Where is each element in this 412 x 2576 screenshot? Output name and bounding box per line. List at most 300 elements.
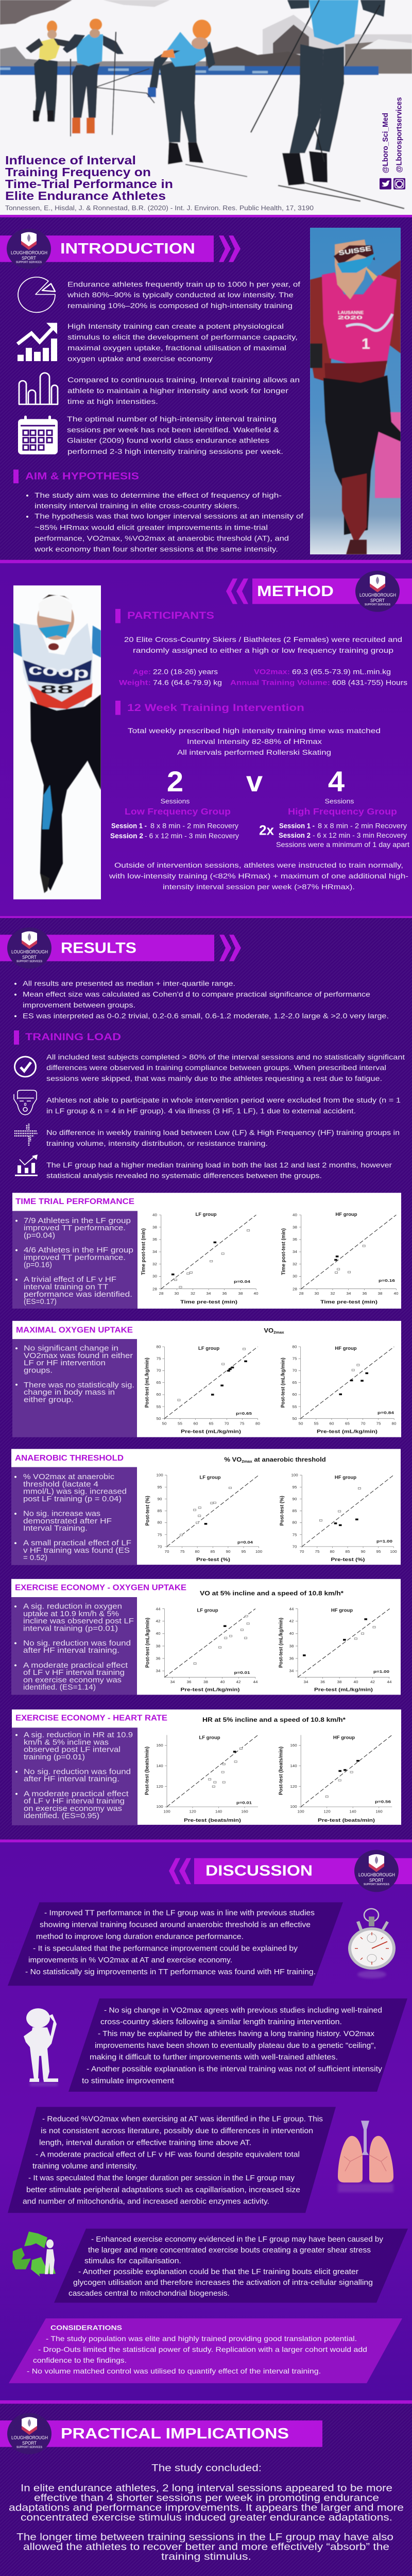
participant statistics: 22.0 (18-26) years [153, 668, 218, 676]
participant statistics: 74.6 (64.6-79.9) kg [153, 679, 222, 687]
scatter chart: HF group time trial: 34 [347, 1291, 351, 1296]
citation: Tonnessen, E., Hisdal, J. & Ronnestad, B.R. (2020) - Int. J. Environ. Res. Public Health, 17, 3190 [5, 204, 314, 212]
bullet list: statistics [14, 980, 389, 1020]
heading banner: method: METHOD [257, 583, 334, 600]
scatter chart: LF group anaerobic threshold: 85 [158, 1509, 162, 1513]
icon: pie chart [18, 277, 55, 312]
findings box: VO2max: VO2max was found in either [24, 1351, 133, 1360]
scatter chart: LF group anaerobic threshold: 95 [158, 1485, 162, 1489]
scatter chart: HF group oxygen uptake: Pre-test (mL/kg/min) [314, 1687, 373, 1692]
text: no difference in load: training volume, intensity distribution, or resistance training. [46, 1140, 268, 1148]
heading: aim and hypothesis: AIM & HYPOTHESIS [25, 471, 139, 482]
scatter chart: LF group time trial: 28 [152, 1287, 157, 1291]
scatter chart: LF group anaerobic threshold: p=0.04 [237, 1540, 253, 1545]
scatter chart: LF group anaerobic threshold: 100 [255, 1549, 263, 1554]
scatter chart: HF group anaerobic threshold [279, 1472, 397, 1563]
findings box: heart rate economy: A moderate practical effect [24, 1790, 129, 1798]
bullet list: statistics: ES was interpreted as 0-0.2 trivial, 0.2-0.6 small, 0.6-1.2 moderate, 1.2-2.0 large & >2.0 very large. [23, 1012, 389, 1020]
scatter chart: LF group time trial [141, 1212, 259, 1305]
scatter chart: HF group heart rate: p=0.56 [375, 1800, 391, 1804]
scatter chart: LF group VO2max: 55 [178, 1421, 183, 1426]
heading: exercise economy heart rate: EXERCISE ECONOMY - HEART RATE [15, 1714, 167, 1723]
scatter chart: LF group heart rate: p=0.01 [236, 1801, 252, 1805]
scatter chart: LF group anaerobic threshold: 90 [226, 1549, 231, 1554]
scatter chart: HF group anaerobic threshold: 95 [293, 1485, 297, 1489]
scatter chart: HF group VO2max: 70 [361, 1421, 366, 1426]
findings box: anaerobic threshold: % VO2max at anaerobic [23, 1472, 114, 1481]
scatter chart: HF group anaerobic threshold: 80 [330, 1549, 335, 1554]
findings box: heart rate economy: km/h & 5% incline was [24, 1738, 109, 1747]
findings box: time trial: 7/9 Athletes in the LF group [24, 1216, 131, 1225]
scatter chart: HF group time trial: 32 [331, 1291, 335, 1296]
scatter chart: HF group heart rate: 120 [323, 1809, 331, 1814]
scatter chart: HF group oxygen uptake: 38 [289, 1644, 294, 1649]
scatter chart: LF group anaerobic threshold: 85 [211, 1549, 215, 1554]
panel: anaerobic threshold [11, 1449, 401, 1565]
scatter chart: LF group anaerobic threshold: 80 [195, 1549, 200, 1554]
title: Training Frequency on [5, 166, 151, 179]
participant statistics: Weight: [119, 679, 151, 687]
text: median training load: The LF group had a higher median training load in both the last 12 and last 2 months, however [46, 1161, 392, 1170]
comparison: 2 v 4 sessions: v [246, 766, 263, 798]
chart title: VO2max: 2max [273, 1330, 284, 1334]
scatter chart: LF group oxygen uptake: 34 [156, 1668, 161, 1673]
callout: anaerobic threshold discussion: is not consistent across literature, possibly due to differences in intervention [41, 2127, 313, 2135]
logo: Loughborough Sport: SPORT [370, 598, 385, 603]
scatter chart: HF group VO2max: 80 [293, 1345, 297, 1349]
scatter chart: HF group anaerobic threshold: 90 [361, 1549, 366, 1554]
chart title: percent VO2max at anaerobic threshold: 2max [242, 1459, 252, 1464]
heading: 12 week training intervention [115, 701, 304, 715]
logo: Loughborough Sport: SUPPORT SERVICES [16, 2446, 42, 2449]
scatter chart: HF group heart rate: Post-test (beats/min) [278, 1747, 284, 1795]
panel: maximal oxygen uptake [12, 1321, 401, 1437]
heading banner: results [0, 935, 241, 961]
panel: exercise economy heart rate [12, 1709, 401, 1825]
scatter chart: LF group anaerobic threshold: 70 [165, 1549, 169, 1554]
scatter chart: HF group anaerobic threshold: 95 [376, 1549, 381, 1554]
text: compliance: sessions were skipped, that was mainly due to the athletes requesting a rest due to fatigue. [46, 1075, 382, 1083]
scatter chart: HF group time trial: 34 [293, 1249, 298, 1254]
logo: Loughborough Sport: SPORT [22, 256, 36, 261]
callout: VO2max discussion [68, 1998, 407, 2092]
scatter chart: LF group VO2max: 60 [157, 1392, 161, 1397]
scatter chart: HF group oxygen uptake: 44 [289, 1606, 294, 1611]
heading banner: discussion [169, 1858, 412, 1884]
text: no difference in load [46, 1129, 400, 1148]
logo: Loughborough Sport: LOUGHBOROUGH [11, 2435, 48, 2440]
heading banner: introduction: INTRODUCTION [60, 241, 195, 257]
findings box: anaerobic threshold: demonstrated after HF [23, 1517, 112, 1526]
callout: considerations: - The study population was elite and highly trained providing good translation potential. [46, 2334, 357, 2343]
logo: Loughborough Sport [354, 1850, 399, 1892]
callout: time trial discussion [8, 1902, 343, 1986]
text: compliance: differences were observed in training compliance between groups. When prescribed interval [46, 1064, 386, 1072]
scatter chart: HF group time trial: Time pre-test (min) [320, 1299, 377, 1305]
scatter chart: HF group heart rate: 160 [375, 1809, 383, 1814]
bullet list: aim and hypothesis: The hypothesis was that two longer interval sessions at an intensity of [35, 513, 304, 521]
scatter chart: HF group heart rate: Pre-test (beats/min) [318, 1818, 375, 1823]
text: study conclusion: training stimulus. [161, 2551, 251, 2563]
high frequency session details: - 6 x 12 min - 3 min Recovery [313, 831, 407, 839]
callout: considerations: CONSIDERATIONS [50, 2324, 122, 2331]
scatter chart: LF group anaerobic threshold: LF group [199, 1475, 221, 1480]
chart title: VO at 5% incline: VO at 5% incline and a speed of 10.8 km/h* [200, 1590, 344, 1597]
findings box: time trial: (p=0.04) [24, 1231, 55, 1240]
scatter chart: LF group VO2max: 75 [240, 1421, 245, 1426]
skier 3 [160, 61, 197, 142]
chart title: HR at 5% incline: HR at 5% incline and a speed of 10.8 km/h* [202, 1716, 346, 1723]
scatter chart: HF group time trial: Time post-test (min) [281, 1228, 287, 1275]
high frequency session details: Session 1 - [279, 822, 315, 830]
scatter chart: HF group heart rate [278, 1735, 392, 1823]
divider bar [0, 2400, 412, 2404]
text: participants description: randomly assigned to either a high or low frequency training group [133, 647, 393, 655]
callout: VO2max discussion: improvements have been shown to eventually plateau due to a genetic "ceiling", [95, 2041, 376, 2050]
scatter chart: LF group VO2max: 80 [157, 1345, 161, 1349]
photo: female skier in pink bib: 2020 [338, 315, 363, 321]
scatter chart: LF group time trial: 34 [152, 1249, 158, 1254]
scatter chart: HF group time trial: p=0.16 [379, 1278, 396, 1283]
findings box: VO2max: LF or HF intervention [24, 1359, 106, 1367]
callout: time trial discussion: - Improved TT performance in the LF group was in line with previous studies [44, 1909, 315, 1918]
callout: considerations: - Drop-Outs limited the statistical power of study. Replication with a larger cohort would add [38, 2345, 367, 2353]
scatter chart: LF group oxygen uptake: 34 [170, 1680, 175, 1684]
scatter chart: HF group heart rate: 120 [290, 1784, 297, 1789]
findings box: oxygen uptake economy: identified. (ES=1.14) [23, 1683, 96, 1692]
icon: stopwatch [348, 1909, 396, 1978]
heading banner: practical implications: PRACTICAL IMPLICATIONS [61, 2426, 289, 2442]
scatter chart: LF group oxygen uptake: 38 [203, 1680, 208, 1684]
text: participants description [124, 636, 402, 655]
findings box: time trial: performance was identified. [24, 1290, 132, 1299]
callout: exercise economy discussion: glycogen utilisation and therefore increases the activation of intra-cellular signalling [73, 2278, 373, 2287]
scatter chart: HF group VO2max: 55 [314, 1421, 319, 1426]
callout: exercise economy discussion: - Another possible explanation could be that the LF training bouts elicit greater [78, 2267, 358, 2276]
findings box: time trial: 4/6 Athletes in the HF group [24, 1246, 133, 1255]
icon: lungs [338, 2121, 393, 2192]
callout: anaerobic threshold discussion: length, interval duration or effective training time above AT. [39, 2139, 251, 2147]
scatter chart: HF group time trial: 36 [363, 1291, 367, 1296]
findings box: VO2max: either group. [24, 1396, 74, 1404]
findings box: heart rate economy: No sig. reduction was found [24, 1768, 131, 1776]
text: study conclusion: allowed the athletes to recover better and more effectively “absorb” the [23, 2541, 389, 2553]
scatter chart: HF group time trial: 40 [394, 1291, 399, 1296]
comparison: 2 v 4 sessions: Sessions [161, 798, 190, 805]
comparison: 2 v 4 sessions: Sessions [325, 798, 354, 805]
scatter chart: HF group anaerobic threshold: 75 [315, 1549, 320, 1554]
findings box: heart rate economy [12, 1727, 138, 1825]
scatter chart: LF group anaerobic threshold: Pre-test (%) [196, 1557, 230, 1563]
scatter chart: HF group VO2max: 65 [345, 1421, 350, 1426]
text: intervention description: Interval Intensity 82-88% of HRmax [187, 738, 322, 746]
scatter chart: LF group time trial: Time post-test (min) [141, 1228, 147, 1275]
scatter chart: HF group time trial: 38 [378, 1291, 382, 1296]
findings box: oxygen uptake economy: incline was observed post LF [23, 1617, 134, 1625]
scatter chart: LF group heart rate: 140 [156, 1764, 163, 1768]
scatter chart: HF group heart rate: 140 [349, 1809, 356, 1814]
logo: Loughborough Sport [7, 927, 52, 969]
callout: VO2max discussion: making it difficult to further improvements with well-trained athletes. [90, 2053, 338, 2062]
findings box: anaerobic threshold: v HF training was found (ES [23, 1546, 130, 1555]
findings box: VO2max: change in body mass in [24, 1388, 115, 1397]
scatter chart: HF group anaerobic threshold: 70 [293, 1545, 297, 1549]
heading: 12 week training intervention: 12 Week Training Intervention [127, 703, 304, 714]
findings box: oxygen uptake economy: A sig. reduction in oxygen [23, 1602, 122, 1611]
scatter chart: HF group time trial: 38 [293, 1225, 297, 1229]
bullet list: statistics: All results are presented as median + inter-quartile range. [23, 980, 235, 988]
text: continuous vs interval: Compared to continuous training, Interval training allows an [67, 376, 300, 384]
photo: male skier in Coop bib [13, 585, 101, 900]
chart title: percent VO2max at anaerobic threshold: % VO [224, 1456, 242, 1463]
text: study conclusion: adaptations and performance improvements. It appears the larger and more [9, 2502, 404, 2513]
findings box: oxygen uptake economy: of LF v HF interval training [23, 1668, 125, 1677]
findings box: time trial: (ES=0.17) [24, 1297, 57, 1306]
text: median training load: statistical analysis revealed no systematic differences between the groups. [46, 1172, 322, 1180]
scatter chart: LF group heart rate: 160 [156, 1743, 163, 1748]
low frequency session details [110, 822, 239, 840]
comparison: 2 v 4 sessions: 4 [328, 766, 345, 798]
low frequency session details: 8 x 8 min - 2 min Recovery [150, 822, 239, 830]
scatter chart: HF group anaerobic threshold: 85 [346, 1549, 350, 1554]
scatter chart: LF group oxygen uptake: 36 [187, 1680, 191, 1684]
callout: considerations [9, 2318, 402, 2383]
scatter chart: HF group time trial: 36 [293, 1237, 297, 1242]
photo: male skier in Coop bib: coop [28, 661, 90, 682]
heading banner: discussion: DISCUSSION [205, 1862, 313, 1879]
social handles: @Lborosportservices [395, 97, 404, 173]
divider bar [0, 1839, 412, 1842]
photo: female skier in pink bib: SUISSE [338, 245, 372, 257]
scatter chart: HF group anaerobic threshold: Pre-test (%) [331, 1557, 365, 1563]
participant statistics [119, 668, 407, 687]
callout: exercise economy discussion: the larger and more concentrated exercise bouts creating a greater shear stress [88, 2246, 371, 2255]
callout: time trial discussion: showing interval training focused around anaerobic threshold is an effective [40, 1921, 311, 1929]
comparison: 2 v 4 sessions: Low Frequency Group [125, 806, 231, 817]
scatter chart: HF group VO2max: p=0.84 [377, 1411, 394, 1415]
callout: anaerobic threshold discussion: better stimulate peripheral adaptations such as capillarisation, increased size [26, 2185, 300, 2194]
text: outside of intervention: with low-intensity training (<82% HRmax) + maximum of one additional high- [109, 872, 408, 880]
heading: maximal oxygen uptake: MAXIMAL OXYGEN UPTAKE [16, 1326, 133, 1334]
findings box: time trial: A trivial effect of LF v HF [24, 1276, 116, 1284]
scatter chart: HF group anaerobic threshold: Post-test (%) [279, 1496, 285, 1526]
scatter chart: HF group time trial [281, 1212, 399, 1305]
scatter chart: LF group heart rate: Pre-test (beats/min) [184, 1818, 241, 1823]
scatter chart: HF group anaerobic threshold: 80 [293, 1520, 297, 1525]
text: intervention description: Total weekly prescribed high intensity training time was matched [128, 727, 381, 735]
scatter chart: LF group heart rate: 140 [215, 1809, 222, 1814]
comparison: 2 v 4 sessions [125, 766, 397, 817]
bullet list: aim and hypothesis: The study aim was to determine the effect of frequency of high- [35, 492, 282, 500]
icon: dotted arrows [14, 1124, 38, 1146]
scatter chart: HF group oxygen uptake: 36 [320, 1680, 325, 1684]
scatter chart: HF group VO2max: 55 [293, 1404, 297, 1409]
scatter chart: LF group oxygen uptake [145, 1606, 258, 1692]
scatter chart: LF group VO2max: 80 [255, 1421, 261, 1426]
low frequency session details: - 6 x 12 min - 3 min Recovery [145, 832, 239, 840]
logo: Loughborough Sport: SUPPORT SERVICES [365, 603, 390, 606]
findings box: oxygen uptake economy: A moderate practical effect [23, 1661, 128, 1670]
scatter chart: HF group anaerobic threshold: 75 [293, 1533, 297, 1537]
scatter chart: LF group time trial: Time pre-test (min) [180, 1299, 237, 1305]
findings box: anaerobic threshold: threshold (lactate 4 [23, 1480, 98, 1488]
scatter chart: HF group anaerobic threshold: 100 [390, 1549, 397, 1554]
scatter chart: LF group heart rate: 100 [163, 1809, 170, 1814]
scatter chart: LF group anaerobic threshold: 75 [158, 1533, 162, 1537]
high frequency session details: 8 x 8 min - 2 min Recovery [318, 822, 407, 830]
scatter chart: LF group time trial: 32 [191, 1291, 195, 1296]
scatter chart: LF group time trial: 28 [159, 1291, 163, 1296]
high frequency session details: Sessions were a minimum of 1 day apart [276, 840, 409, 849]
text: participants description: 20 Elite Cross-Country Skiers / Biathletes (2 Females) were recruited and [124, 636, 402, 644]
callout: time trial discussion: - It is speculated that the performance improvement could be explained by [33, 1944, 298, 1953]
findings box: oxygen uptake economy: after HF interval training. [23, 1647, 119, 1655]
scatter chart: LF group heart rate: LF group [199, 1735, 220, 1740]
findings box: anaerobic threshold: No sig. increase was [23, 1510, 100, 1518]
skier 4 foreground [289, 44, 323, 153]
text: continuous vs interval: time at high intensities. [67, 398, 158, 406]
panel: method [0, 563, 412, 916]
callout: exercise economy discussion [54, 2229, 408, 2303]
scatter chart: LF group oxygen uptake: 42 [236, 1680, 241, 1684]
icon: rounded bars [19, 373, 58, 404]
text: compliance: All included test subjects completed > 80% of the interval sessions and no statistically significant [46, 1054, 405, 1061]
scatter chart: LF group VO2max: LF group [198, 1346, 220, 1351]
scatter chart: LF group time trial: 30 [152, 1274, 158, 1279]
scatter chart: LF group anaerobic threshold: Post-test (%) [145, 1496, 151, 1526]
findings box: oxygen uptake economy: on exercise economy was [23, 1676, 122, 1684]
bullet list: aim and hypothesis: work economy than four shorter sessions at the same intensity. [34, 546, 278, 553]
heading: training load: TRAINING LOAD [25, 1032, 121, 1043]
scatter chart: HF group VO2max: 60 [293, 1392, 297, 1397]
scatter chart: LF group VO2max: 65 [157, 1380, 161, 1385]
logo: Loughborough Sport: LOUGHBOROUGH [11, 950, 48, 954]
scatter chart: LF group anaerobic threshold: 100 [156, 1472, 163, 1477]
scatter chart: LF group VO2max [144, 1345, 261, 1434]
scatter chart: HF group anaerobic threshold: 70 [300, 1549, 304, 1554]
logo: Loughborough Sport [7, 2413, 52, 2454]
scatter chart: LF group time trial: 40 [152, 1213, 158, 1217]
text: high intensity stimulus: High Intensity training can create a potent physiological [67, 323, 284, 331]
scatter chart: LF group VO2max: Post-test (mL/kg/min) [144, 1358, 150, 1408]
callout: anaerobic threshold discussion [8, 2107, 336, 2213]
icon: calendar [18, 416, 58, 454]
findings box: VO2max: No significant change in [24, 1344, 118, 1352]
text: optimal number of sessions: performed 2-3 high intensity training sessions per week. [67, 448, 283, 456]
scatter chart: HF group VO2max: 75 [293, 1357, 297, 1361]
chart title: VO2max: VO [264, 1327, 273, 1334]
scatter chart: LF group VO2max: 50 [157, 1416, 161, 1421]
scatter chart: LF group anaerobic threshold: 80 [158, 1520, 162, 1525]
heading: participants [115, 609, 214, 623]
findings box: VO2max [12, 1339, 137, 1437]
text: optimal number of sessions: The optimal number of high-intensity interval training [67, 415, 277, 423]
scatter chart: HF group oxygen uptake [278, 1606, 392, 1692]
text: exclusions: in LF group & n = 4 in HF group). 4 via illness (3 HF, 1 LF), 1 due to external accident. [46, 1107, 356, 1115]
text: study conclusion: The study concluded: [151, 2463, 262, 2473]
text: optimal number of sessions: sessions per week has not been identified. Wakefield & [67, 426, 279, 434]
scatter chart: LF group heart rate: 160 [241, 1809, 248, 1814]
photo: male skier in Coop bib: 88 [40, 683, 74, 696]
scatter chart: HF group anaerobic threshold: p=1.00 [376, 1539, 393, 1544]
scatter chart: HF group time trial: HF group [335, 1212, 357, 1217]
scatter chart: LF group anaerobic threshold [145, 1472, 263, 1563]
callout: VO2max discussion: - This may be explained by the athletes having a long training history. VO2max [98, 2029, 374, 2038]
scatter chart: LF group anaerobic threshold: 95 [242, 1549, 246, 1554]
heading: time trial performance: TIME TRIAL PERFORMANCE [15, 1197, 134, 1206]
text: outside of intervention: intensity interval session per week (>87% HRmax). [163, 883, 355, 891]
social handles [380, 97, 405, 190]
scatter chart: HF group anaerobic threshold: 90 [293, 1497, 297, 1501]
scatter chart: HF group VO2max: 75 [376, 1421, 381, 1426]
text: continuous vs interval: athlete to maintain a higher intensity and work for longer [67, 387, 288, 395]
icon: recycling arrows with figure [12, 2231, 56, 2277]
findings box: anaerobic threshold: post LF training (p = 0.04) [23, 1495, 122, 1503]
scatter chart: LF group time trial: 36 [222, 1291, 227, 1296]
logo: Loughborough Sport: SPORT [22, 2441, 37, 2446]
text: study conclusion [9, 2463, 404, 2563]
text: training distribution: Endurance athletes frequently train up to 1000 h per year, of [67, 281, 301, 289]
findings box: anaerobic threshold: Interval Training. [23, 1524, 88, 1533]
scatter chart: HF group heart rate: 140 [290, 1764, 297, 1768]
high frequency session details: Session 2 [279, 831, 311, 839]
callout: exercise economy discussion: cascades central to mitochondrial biogenesis. [68, 2289, 230, 2298]
scatter chart: HF group time trial: 32 [293, 1262, 297, 1266]
scatter chart: HF group oxygen uptake: Post-test (mL/kg/min) [278, 1618, 284, 1668]
participant statistics: VO2max: [254, 668, 290, 676]
callout: VO2max discussion: - Another possible explanation is the interval training was not of sufficient intensity [87, 2065, 382, 2073]
scatter chart: HF group oxygen uptake: 38 [337, 1680, 341, 1684]
icon: rising bar chart [18, 323, 57, 361]
scatter chart: LF group time trial: 30 [175, 1291, 179, 1296]
photo: female skier in pink bib: LAUSANNE [338, 310, 364, 315]
scatter chart: LF group VO2max: Pre-test (mL/kg/min) [181, 1429, 241, 1434]
logo: Loughborough Sport [355, 571, 400, 612]
text: exclusions [46, 1096, 401, 1115]
high frequency session details [259, 822, 409, 849]
scatter chart: HF group heart rate: 100 [290, 1804, 297, 1809]
callout: anaerobic threshold discussion: training volume and intensity. [32, 2162, 138, 2171]
scatter chart: LF group oxygen uptake: 40 [156, 1631, 161, 1636]
logo: Loughborough Sport: SPORT [369, 1878, 384, 1883]
scatter chart: LF group anaerobic threshold: 90 [158, 1497, 162, 1501]
findings box: anaerobic threshold: mmol/L) was sig. increased [23, 1487, 127, 1496]
logo: Loughborough Sport: SUPPORT SERVICES [16, 960, 42, 963]
callout: exercise economy discussion: - Enhanced exercise economy evidenced in the LF group may have been caused by [91, 2235, 383, 2244]
callout: considerations: - No volume matched control was utilised to quantify effect of the interval training. [27, 2367, 321, 2375]
callout: time trial discussion: - No statistically sig improvements in TT performance was found with HF training. [25, 1968, 316, 1976]
scatter chart: HF group time trial: 28 [299, 1291, 303, 1296]
heading: aim and hypothesis [13, 469, 139, 483]
panel: exercise economy oxygen uptake [11, 1579, 401, 1695]
title: Influence of Interval [5, 154, 136, 167]
heading: participants: PARTICIPANTS [127, 611, 214, 621]
findings box: oxygen uptake economy: interval training (p=0.01) [23, 1624, 118, 1633]
divider bar [0, 916, 412, 918]
title: Elite Endurance Athletes [5, 189, 166, 202]
text: no difference in load: No difference in weekly training load between Low (LF) & High Frequency (HF) training groups in [46, 1129, 400, 1137]
scatter chart: HF group VO2max: 60 [330, 1421, 334, 1426]
photo: female skier in pink bib: 1 [362, 336, 370, 352]
scatter chart: HF group VO2max: 65 [293, 1380, 297, 1385]
callout: anaerobic threshold discussion: and number of mitochondria, and increased aerobic enzymes activity. [23, 2197, 269, 2206]
scatter chart: LF group anaerobic threshold: 70 [158, 1545, 162, 1549]
callout: considerations: confidence to the findings. [33, 2356, 127, 2364]
scatter chart: LF group VO2max: 70 [157, 1368, 161, 1372]
heading: training load [14, 1030, 121, 1045]
text: high intensity stimulus [67, 323, 298, 363]
high frequency session details: 2x [259, 822, 274, 838]
